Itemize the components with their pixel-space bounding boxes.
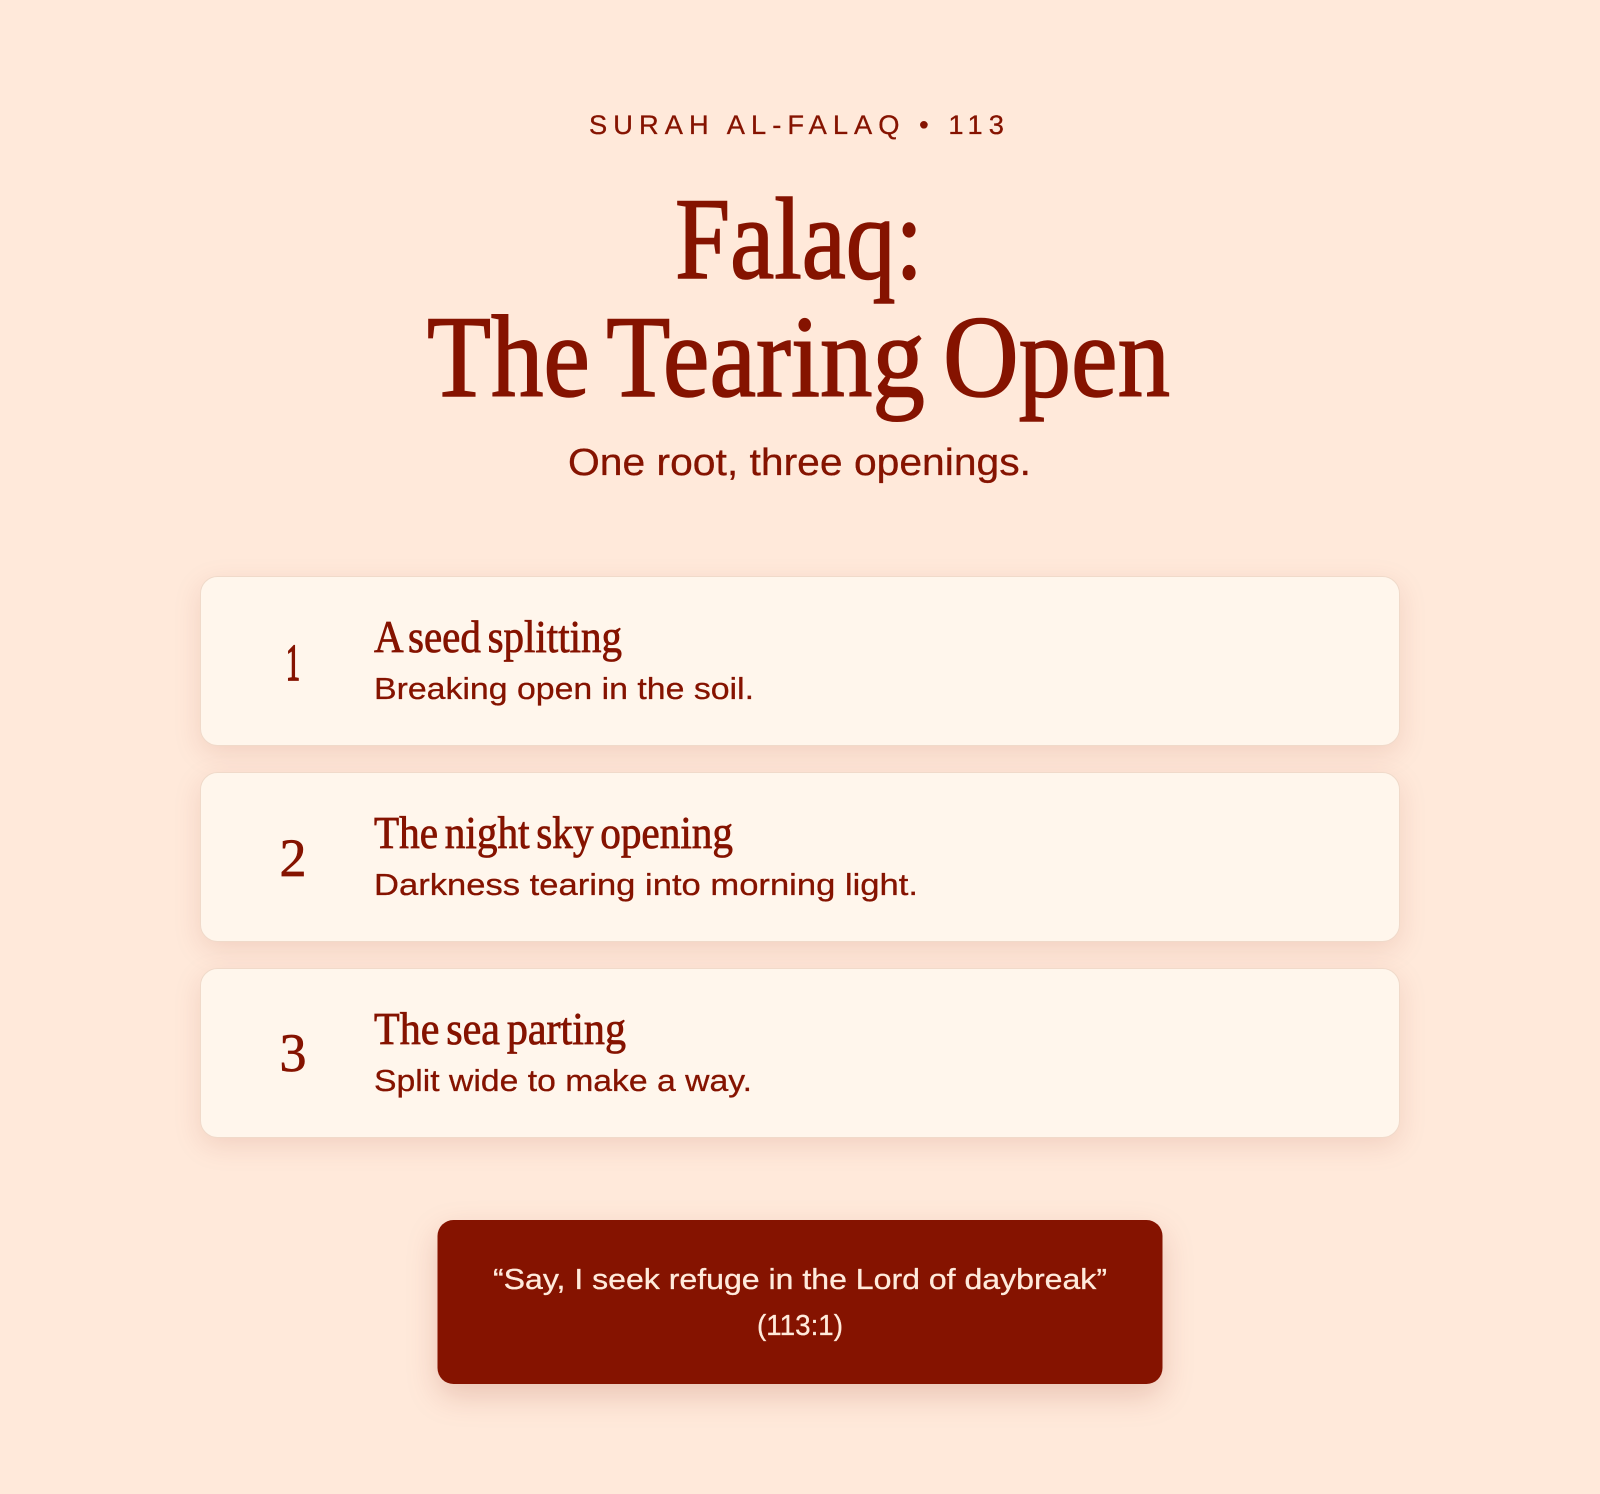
title line two: The Tearing Open <box>427 293 1170 422</box>
quote text: “Say, I seek refuge in the Lord of daybreak” <box>493 1264 1107 1296</box>
heading: the sea parting: The sea parting <box>374 1003 626 1054</box>
card background <box>200 772 1400 942</box>
panel: opening 1 <box>200 576 1400 746</box>
number 1: 1 <box>286 635 300 692</box>
quote background <box>438 1220 1162 1384</box>
eyebrow label: SURAH AL-FALAQ • 113 <box>589 110 1010 140</box>
number 3: 3 <box>280 1023 306 1083</box>
panel: opening 2 <box>200 772 1400 942</box>
description: Split wide to make a way. <box>374 1063 752 1098</box>
callout: verse quote <box>438 1220 1162 1384</box>
title line one: Falaq: <box>675 175 923 304</box>
heading: the night sky opening: The night sky opening <box>374 807 733 858</box>
panel: opening 3 <box>200 968 1400 1138</box>
description: Darkness tearing into morning light. <box>374 867 918 902</box>
title <box>427 175 1170 422</box>
description: Breaking open in the soil. <box>374 671 754 706</box>
card background <box>200 968 1400 1138</box>
card background <box>200 576 1400 746</box>
number 2: 2 <box>280 828 306 888</box>
heading: a seed splitting: A seed splitting <box>374 611 622 662</box>
subtitle: One root, three openings. <box>568 442 1031 484</box>
verse reference: (113:1) <box>757 1310 843 1342</box>
